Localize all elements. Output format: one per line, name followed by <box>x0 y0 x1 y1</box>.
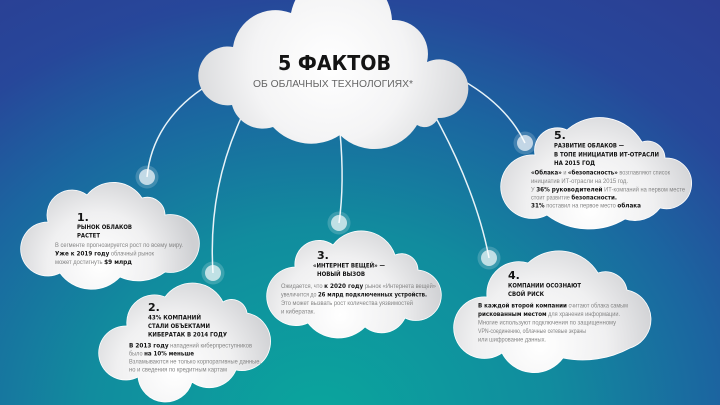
fact 5 text: РАЗВИТИЕ ОБЛАКОВ — <box>554 142 624 150</box>
fact 1 text: РАСТЕТ <box>77 232 101 240</box>
fact 5 text: В ТОПЕ ИНИЦИАТИВ ИТ-ОТРАСЛИ <box>554 152 659 158</box>
fact 5 text: стоит развитие безопасности. <box>531 194 617 202</box>
node dot: fact 1 <box>136 166 158 188</box>
node dot: fact 3 <box>328 212 350 234</box>
connector arc: main cloud to fact 1 <box>147 85 208 177</box>
cloud: fact 3 <box>267 231 441 338</box>
fact 4 text: рискованным местом для хранения информации. <box>478 310 620 318</box>
fact 3 text: «ИНТЕРНЕТ ВЕЩЕЙ» — <box>313 260 385 270</box>
cloud: fact 4 <box>454 251 651 373</box>
fact 2 text: 43% КОМПАНИЙ <box>148 312 201 322</box>
fact 2 text: 2. <box>148 301 160 314</box>
fact 3 text: увеличится до 26 млрд подключенных устройств. <box>281 290 427 298</box>
fact 3 text: и кибератак. <box>281 308 315 316</box>
cloud: fact 1 <box>21 182 199 289</box>
node dot: fact 5 <box>514 132 536 154</box>
fact 4 text: или шифрование данных. <box>478 336 546 344</box>
fact 4 text: КОМПАНИИ ОСОЗНАЮТ <box>508 282 582 290</box>
cloud: fact 5 <box>501 118 692 229</box>
fact 2 text: было на 10% меньше <box>129 350 194 358</box>
cloud: fact 2 <box>99 283 271 402</box>
fact 5 text: «Облака» и «безопасность» возглавляют список <box>531 168 670 176</box>
fact 1 text: Уже к 2019 году облачный рынок <box>55 250 154 258</box>
node dot: fact 2 <box>202 262 224 284</box>
connector arc: main cloud to fact 3 <box>339 132 342 223</box>
fact 3 text: НОВЫЙ ВЫЗОВ <box>317 269 365 278</box>
fact 4 text: В каждой второй компании считают облака самым <box>478 302 628 310</box>
connector arc: main cloud to fact 2 <box>212 118 241 273</box>
fact 3 text: 3. <box>317 249 329 262</box>
fact 1 text <box>55 211 183 266</box>
fact 5 text <box>531 129 685 210</box>
fact 2 text: Взламываются не только корпоративные данные, <box>129 358 261 366</box>
fact 3 text: Ожидается, что к 2020 году рынок «Интернета вещей» <box>281 282 436 290</box>
fact 3 text <box>281 249 436 316</box>
connector arc: main cloud to fact 5 <box>462 80 525 143</box>
title: 5 ФАКТОВ <box>278 51 391 75</box>
subtitle: ОБ ОБЛАЧНЫХ ТЕХНОЛОГИЯХ* <box>253 78 413 90</box>
fact 4 text: Многие используют подключения по защищенному <box>478 320 617 326</box>
fact 5 text: У 36% руководителей ИТ-компаний на первом месте <box>531 186 685 194</box>
fact 1 text: РЫНОК ОБЛАКОВ <box>77 224 132 231</box>
fact 1 text: может достигнуть $9 млрд <box>55 258 132 266</box>
fact 5 text: 31% поставил на первое место облака <box>531 202 641 210</box>
fact 4 text: СВОЙ РИСК <box>508 289 544 298</box>
fact 5 text: 5. <box>554 129 566 142</box>
fact 1 text: В сегменте прогнозируется рост по всему миру. <box>55 242 183 249</box>
fact 2 text: СТАЛИ ОБЪЕКТАМИ <box>148 323 210 330</box>
fact 3 text: Это может вызвать рост количества уязвимостей <box>281 299 413 307</box>
fact 2 text: В 2013 году нападений киберпреступников <box>129 342 252 350</box>
fact 4 text <box>478 269 628 344</box>
fact 5 text: инициатив ИТ-отрасли на 2015 год. <box>531 178 628 185</box>
node dot: fact 4 <box>478 246 500 270</box>
connector arc: main cloud to fact 4 <box>436 118 489 258</box>
main cloud <box>198 0 468 149</box>
fact 2 text <box>129 301 261 374</box>
fact 2 text: КИБЕРАТАК В 2014 ГОДУ <box>148 332 227 338</box>
fact 1 text: 1. <box>77 211 89 224</box>
fact 5 text: НА 2015 ГОД <box>554 160 595 167</box>
fact 2 text: но и сведения по кредитным картам <box>129 366 227 374</box>
fact 4 text: 4. <box>508 269 520 282</box>
fact 4 text: VPN-соединению, облачные сетевые экраны <box>478 327 586 335</box>
